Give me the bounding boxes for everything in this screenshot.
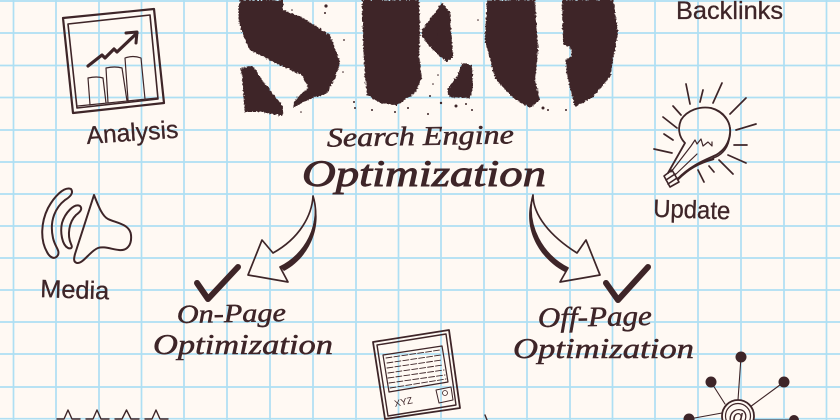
label: on-page Optimization: Optimization	[153, 330, 333, 361]
label: off-page Optimization: Optimization	[513, 334, 694, 365]
icon: off-page check mark	[606, 267, 648, 300]
label: On-Page: On-Page	[177, 298, 286, 329]
heading: Optimization: Optimization	[302, 154, 546, 195]
label: Update: Update	[653, 195, 731, 225]
icon: on-page check mark	[197, 267, 238, 299]
icon: partial mark at bottom edge	[485, 415, 487, 420]
label: Off-Page: Off-Page	[538, 301, 652, 334]
icon: Analysis chart frame	[63, 9, 164, 113]
icon: network around at sign	[684, 352, 799, 420]
label: Media: Media	[40, 275, 110, 305]
heading: Search Engine: Search Engine	[327, 119, 514, 153]
icon: article document: XYZ	[393, 395, 414, 410]
arrow: to on-page optimization	[248, 196, 317, 282]
icon: light bulb	[654, 83, 756, 187]
icon: rating stars	[57, 410, 168, 419]
arrow: to off-page optimization	[529, 195, 600, 282]
icon: media speaker	[42, 188, 131, 263]
label: Analysis: Analysis	[85, 116, 179, 150]
icon: article document	[373, 330, 460, 419]
title: SEO stencil lettering	[238, 0, 618, 116]
